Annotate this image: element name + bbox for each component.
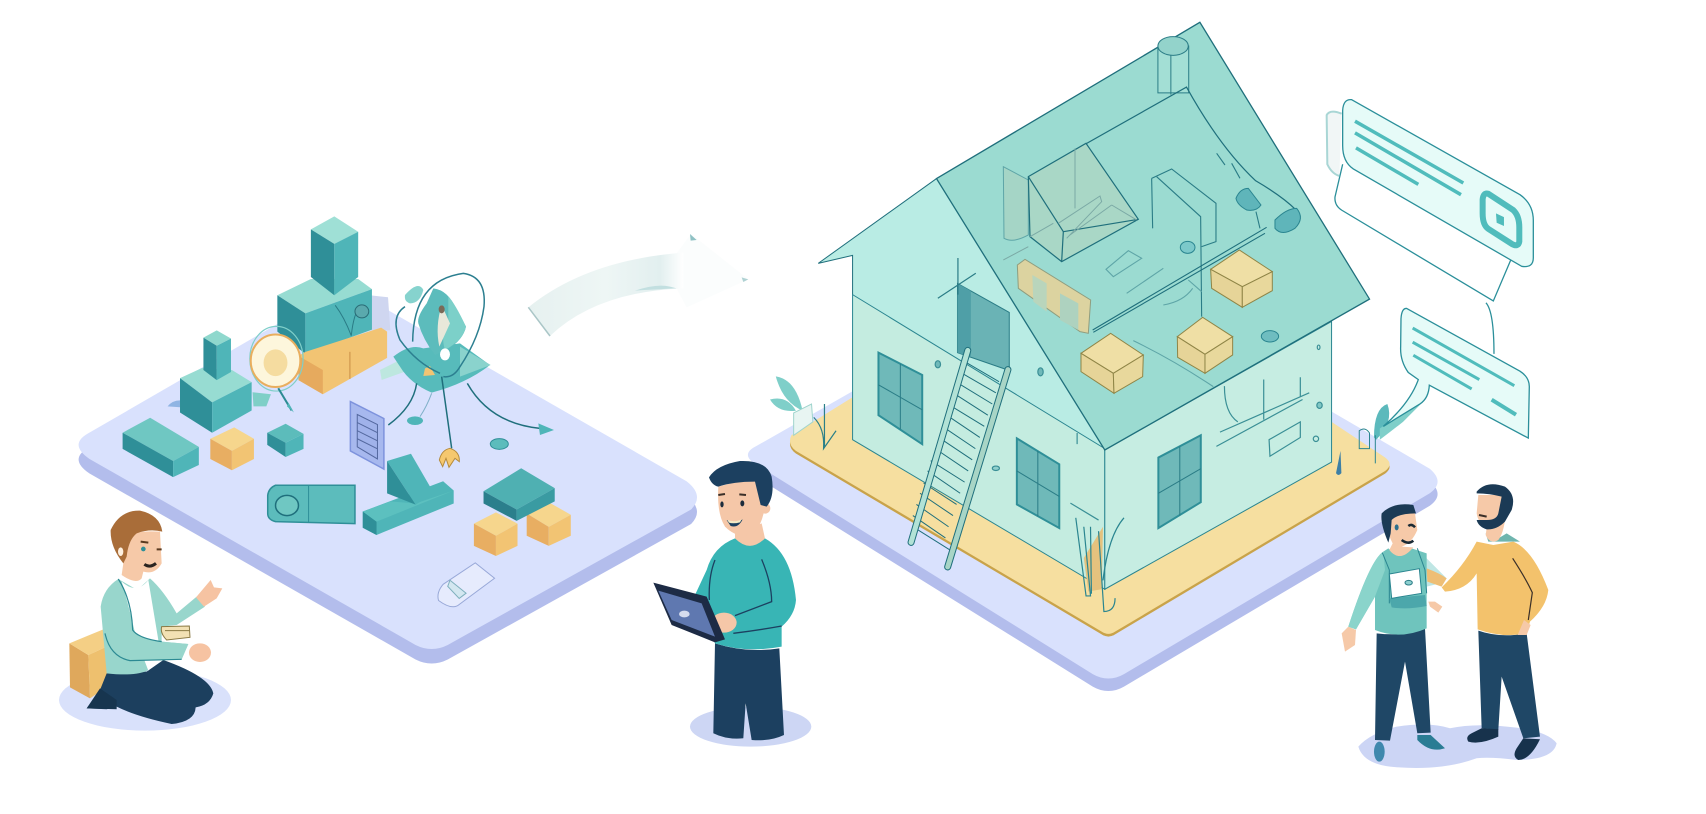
left scene: parts on a platform — [79, 216, 697, 664]
house walls — [818, 179, 1332, 589]
yellow crate under tower — [298, 328, 387, 394]
attic door — [938, 258, 1009, 371]
icon: light bulb — [250, 326, 303, 412]
person: boy with tablet — [1342, 504, 1447, 762]
roof pods — [1180, 188, 1300, 342]
block stack: large tower — [277, 216, 372, 354]
yellow cube — [210, 427, 254, 470]
right scene: isometric house — [748, 22, 1438, 691]
icon: left plant — [770, 376, 836, 449]
arrow: curved transition arrow — [528, 234, 748, 336]
block stack: small tower — [168, 330, 252, 433]
person: man in yellow sweater — [1442, 484, 1548, 760]
striped yellow shelf — [1017, 259, 1091, 333]
platform: right board — [748, 263, 1438, 691]
roof interior: attic contents — [1003, 143, 1300, 393]
L-shaped teal block — [363, 454, 454, 535]
teal chair figure — [380, 273, 554, 467]
platform: left board — [79, 287, 697, 664]
chimney — [1158, 37, 1189, 95]
ladder — [911, 350, 1008, 567]
roof frame edge — [1086, 87, 1296, 210]
chat bubble 2 — [1383, 308, 1529, 438]
yellow foundation — [790, 397, 1390, 637]
wall sketch marks — [935, 345, 1322, 520]
small teal cube — [267, 424, 304, 457]
attic dormer — [1003, 143, 1138, 262]
flat teal box with two yellow cubes — [474, 468, 571, 556]
person: kneeling man with box — [59, 511, 231, 731]
small sketched device — [438, 563, 495, 607]
blueprint document — [350, 402, 384, 469]
attic boxes — [1081, 250, 1272, 393]
attic frame and long beams — [1093, 153, 1267, 387]
person: man with laptop — [653, 461, 811, 747]
lying teal block — [123, 418, 199, 477]
pair of people talking — [1342, 484, 1557, 768]
chat bubbles — [1327, 100, 1533, 438]
roof — [937, 22, 1370, 450]
icon: right plant — [1336, 404, 1421, 475]
chat bubble 1 — [1343, 100, 1533, 267]
corner reeds — [1076, 518, 1124, 612]
back bubble outline — [1327, 112, 1511, 354]
teal machine with dial — [268, 485, 355, 524]
ground shadow — [1358, 724, 1557, 768]
windows — [878, 353, 1201, 528]
